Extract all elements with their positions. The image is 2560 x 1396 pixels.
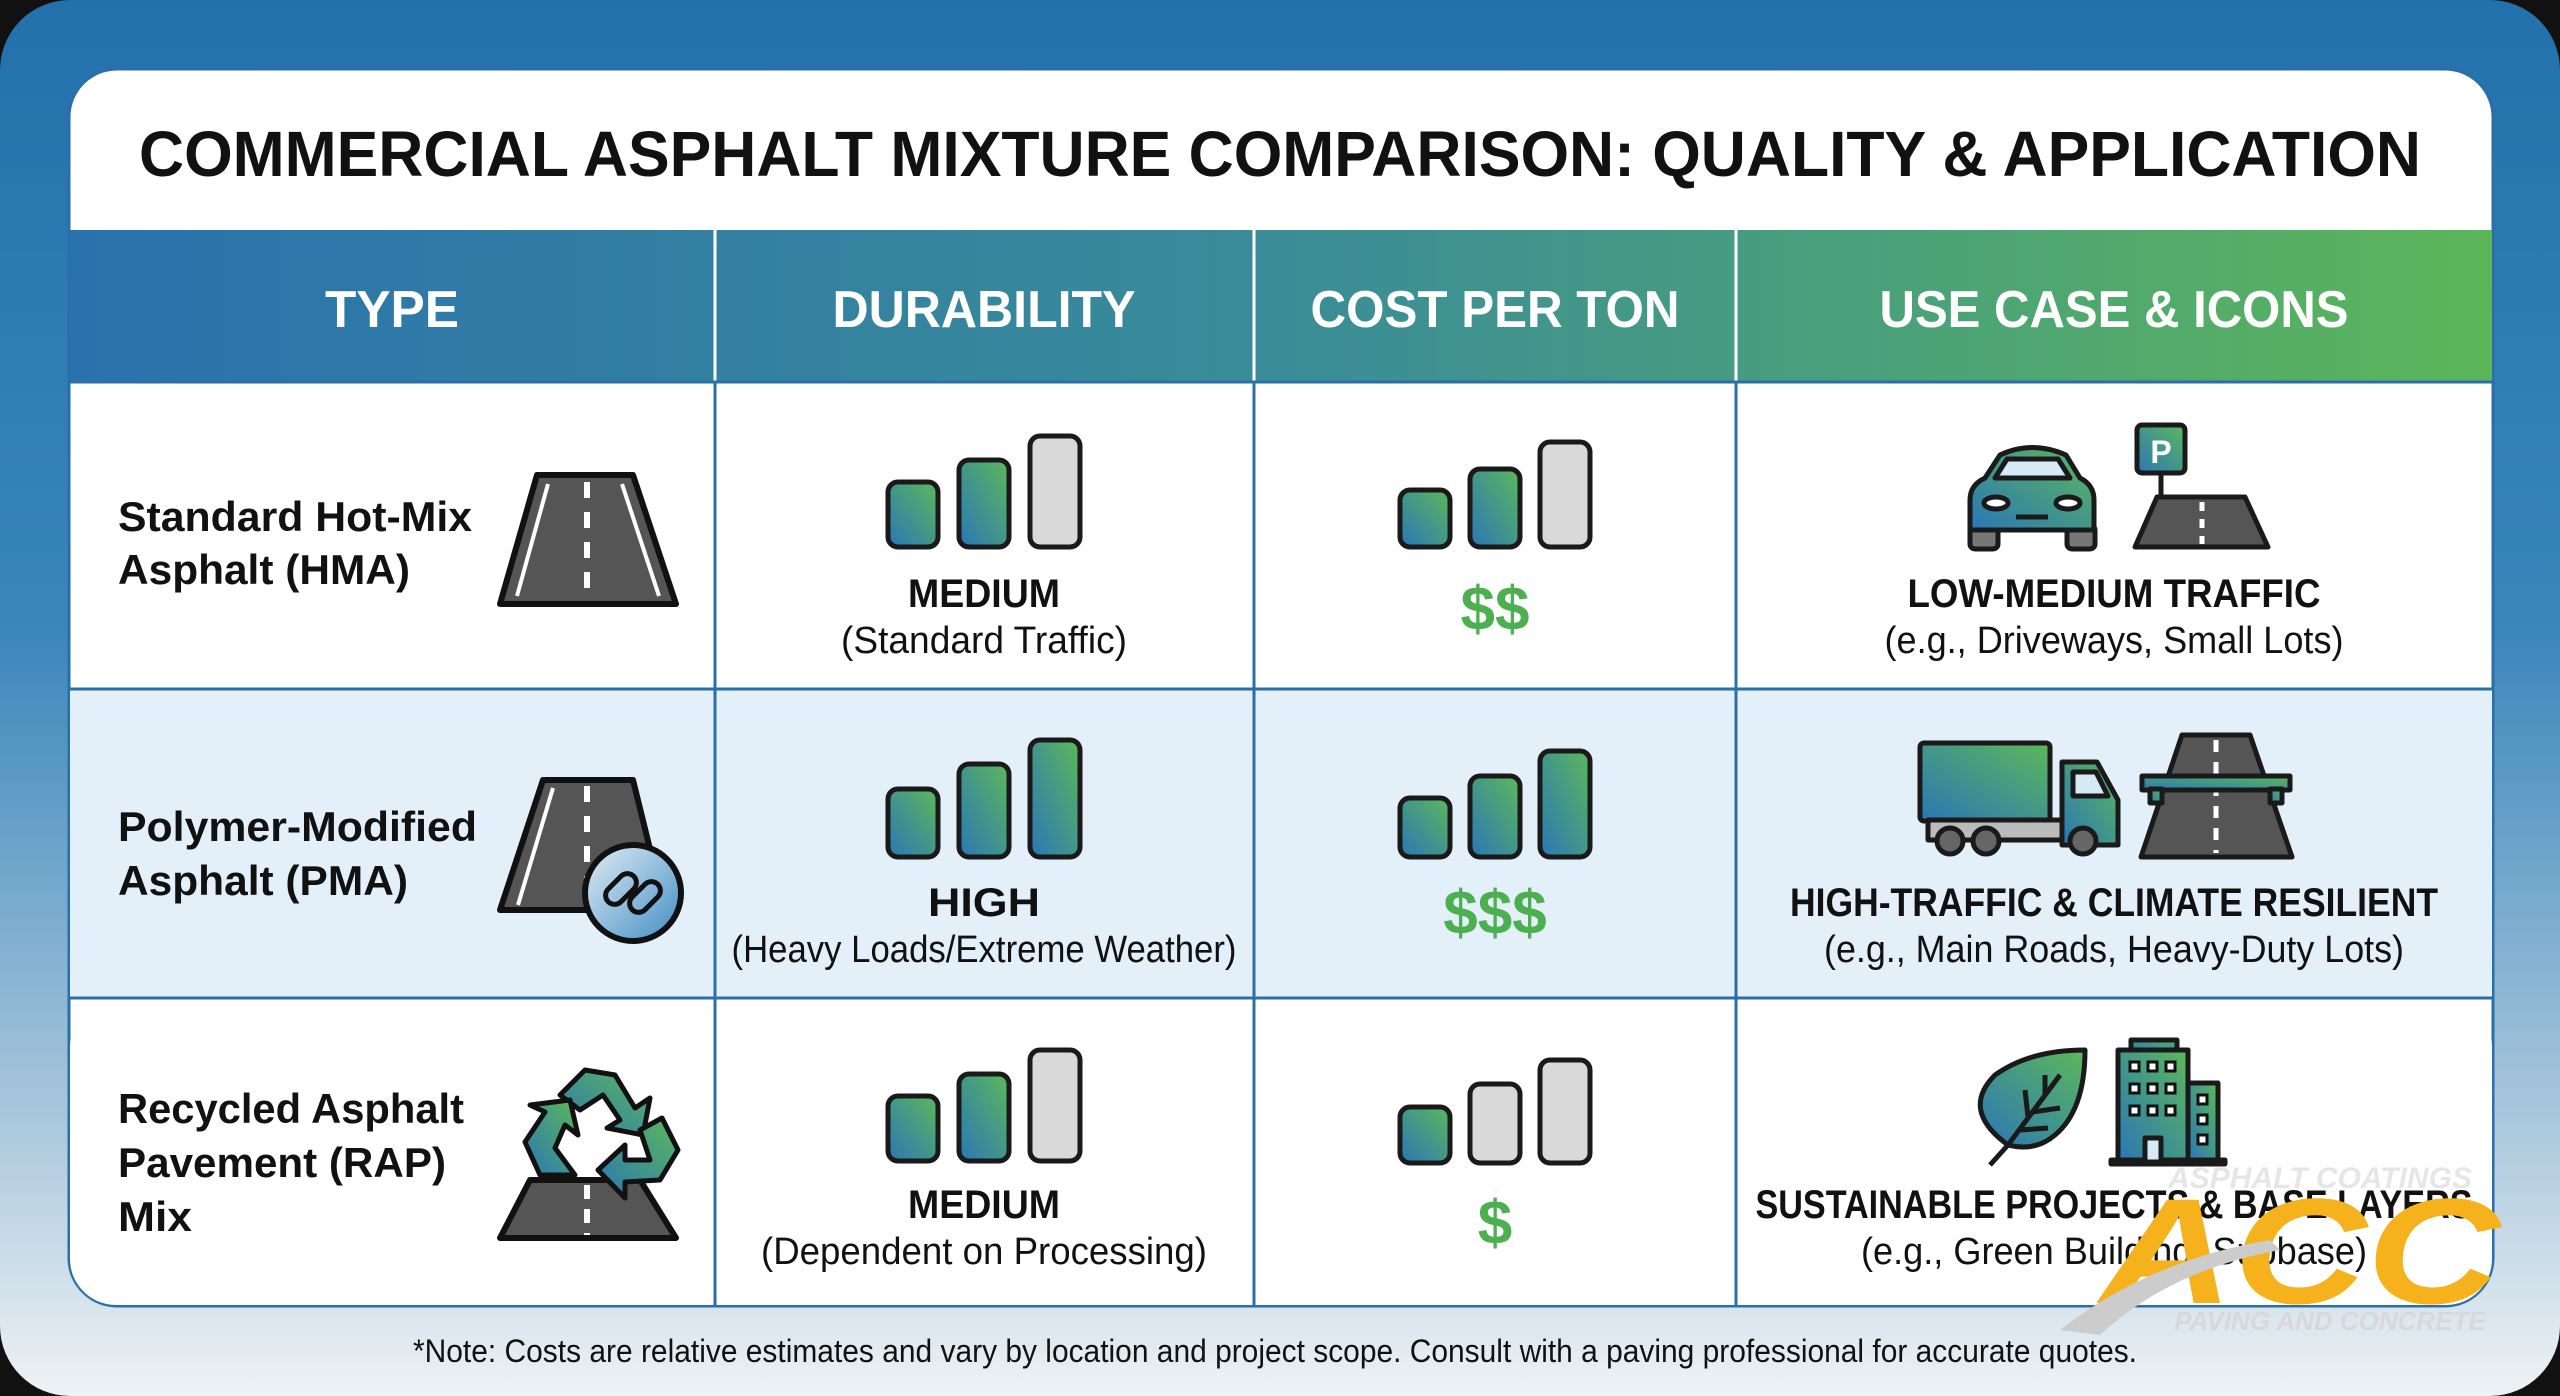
row 2: use case text: HIGH-TRAFFIC & CLIMATE RESILIENT	[1790, 881, 2438, 925]
row 3: durability label	[761, 1183, 1207, 1273]
row 3: RAP type	[118, 1070, 678, 1240]
row 1: cost bars	[1400, 442, 1590, 547]
row 1: durability label: MEDIUM	[908, 572, 1060, 616]
row 2: durability label	[732, 881, 1236, 971]
row 2: durability label: (Heavy Loads/Extreme Weather)	[732, 929, 1236, 971]
row 2: use case icons	[1920, 735, 2292, 857]
text: P	[2150, 434, 2172, 470]
icon: road with chain	[500, 780, 681, 941]
row 3: use case text: (e.g., Green Building, Subbase)	[1861, 1231, 2367, 1273]
title: COMMERCIAL ASPHALT MIXTURE COMPARISON: QUALITY & APPLICATION	[139, 118, 2421, 190]
row 2: durability bars	[888, 740, 1080, 857]
row 3: cost bars	[1400, 1060, 1590, 1163]
row 1: durability label	[841, 572, 1127, 662]
row 1: use case text: (e.g., Driveways, Small Lots)	[1884, 620, 2344, 662]
row 2: cost bars	[1400, 751, 1590, 857]
logo watermark: ASPHALT COATINGS	[2167, 1162, 2472, 1195]
row 2: durability label: HIGH	[928, 881, 1040, 925]
row 1: HMA type: Asphalt (HMA)	[118, 546, 410, 593]
row 3: durability label: MEDIUM	[908, 1183, 1060, 1227]
row 1: HMA type	[118, 475, 676, 604]
row 1: durability label: (Standard Traffic)	[841, 620, 1127, 662]
row 1: use case icons	[1970, 425, 2268, 549]
header row: TYPE	[325, 281, 459, 339]
row 2: PMA type: Polymer-Modified	[118, 803, 477, 850]
row 3: durability bars	[888, 1050, 1080, 1161]
row 1: use case text: LOW-MEDIUM TRAFFIC	[1908, 572, 2320, 616]
row 3: RAP type: Mix	[118, 1193, 193, 1240]
row 2: use case text: (e.g., Main Roads, Heavy-Duty Lots)	[1824, 929, 2404, 971]
row 1: HMA type: Standard Hot-Mix	[118, 493, 473, 540]
row 3: RAP type: Recycled Asphalt	[118, 1085, 464, 1132]
row 1: durability bars	[888, 436, 1080, 547]
icon: road	[500, 475, 676, 604]
row 3: durability label: (Dependent on Processing)	[761, 1231, 1207, 1273]
row 2: cost label: $$$	[1443, 879, 1547, 948]
logo watermark: ACC	[2095, 1167, 2503, 1335]
row 3: cost label: $	[1478, 1189, 1512, 1258]
row 2: PMA type: Asphalt (PMA)	[118, 857, 408, 904]
header row: COST PER TON	[1310, 281, 1680, 339]
logo watermark: PAVING AND CONCRETE	[2174, 1306, 2486, 1336]
row 3: use case icons	[1980, 1040, 2225, 1165]
icon: recycle over road	[500, 1070, 678, 1238]
header row	[70, 230, 2492, 382]
row 3: use case text	[1756, 1183, 2472, 1273]
row 2: PMA type	[118, 780, 681, 941]
row 3: RAP type: Pavement (RAP)	[118, 1139, 446, 1186]
header row: USE CASE & ICONS	[1880, 281, 2348, 339]
row 2: use case text	[1790, 881, 2438, 971]
row 1: use case text	[1884, 572, 2344, 662]
footnote: *Note: Costs are relative estimates and vary by location and project scope. Consult with a paving professional for accurate quotes.	[413, 1333, 2137, 1369]
header row: DURABILITY	[832, 281, 1136, 339]
row 1: cost label: $$	[1461, 575, 1529, 644]
